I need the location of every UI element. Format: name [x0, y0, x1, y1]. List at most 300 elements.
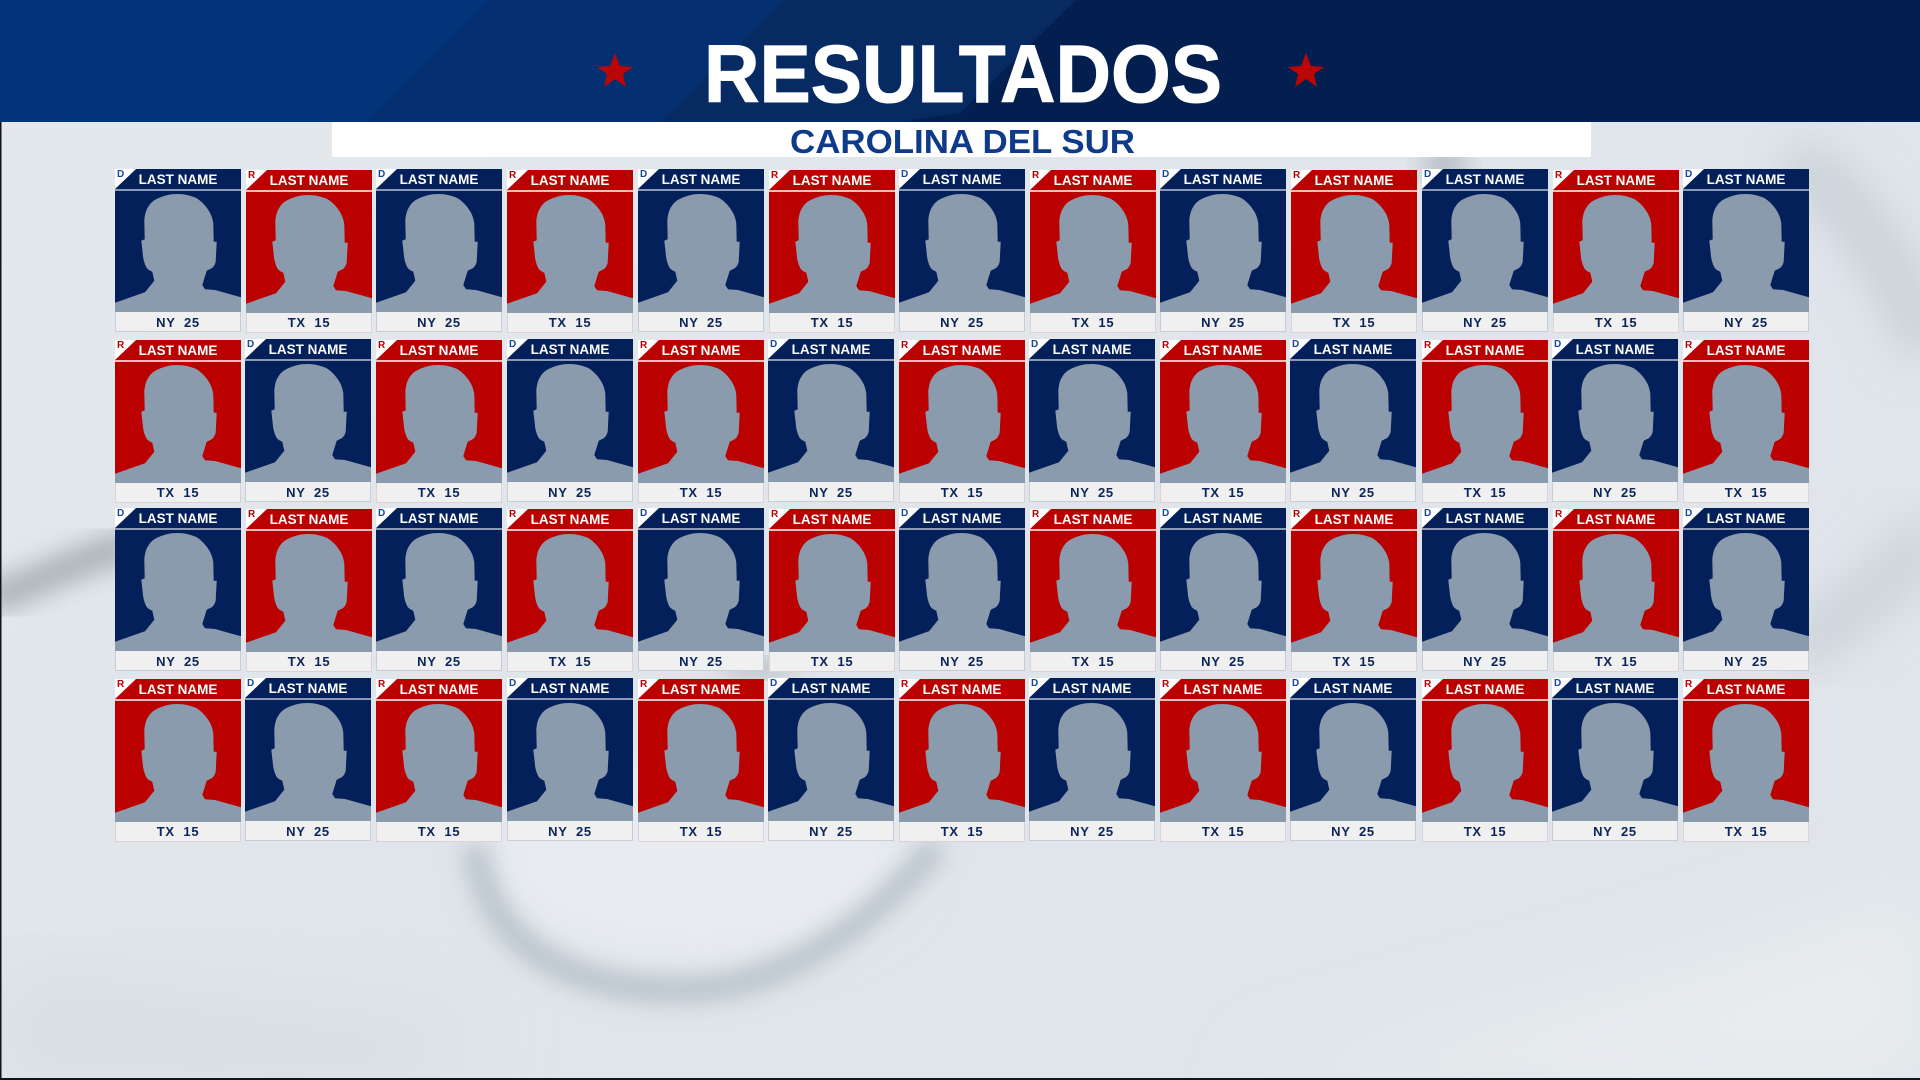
party tag: R: [771, 170, 778, 181]
district: [376, 312, 502, 332]
district: [507, 313, 633, 333]
party tag: [376, 679, 397, 699]
party tag: R: [1293, 170, 1300, 181]
party tag: [1030, 170, 1051, 190]
card: row 3 col 3: [376, 508, 502, 671]
silhouette: [1291, 195, 1417, 313]
district: [246, 652, 372, 672]
district: NY 25: [156, 315, 200, 330]
party tag: [507, 678, 528, 698]
silhouette: [899, 533, 1025, 651]
party tag: [1160, 169, 1181, 189]
silhouette: [376, 533, 502, 651]
party tag: D: [1685, 169, 1692, 180]
name: LAST NAME: [1315, 173, 1393, 188]
district: NY 25: [1463, 654, 1507, 669]
district: TX 15: [941, 485, 983, 500]
district: [1160, 483, 1286, 503]
card: row 4 col 11: [1422, 679, 1548, 842]
district: TX 15: [1333, 654, 1375, 669]
name: LAST NAME: [792, 681, 870, 696]
silhouette: [1422, 194, 1548, 312]
card: row 1 col 4: [507, 170, 633, 333]
district: NY 25: [417, 315, 461, 330]
district: [1422, 312, 1548, 332]
party tag: D: [1554, 339, 1561, 350]
district: [1683, 483, 1809, 503]
district: [1029, 821, 1155, 841]
card: row 4 col 12: [1552, 678, 1678, 841]
silhouette: [1160, 194, 1286, 312]
party tag: [115, 169, 136, 189]
district: [376, 483, 502, 503]
name: LAST NAME: [1053, 681, 1131, 696]
name: LAST NAME: [269, 681, 347, 696]
name: LAST NAME: [139, 682, 217, 697]
district: [768, 482, 894, 502]
name: LAST NAME: [1707, 172, 1785, 187]
card: row 2 col 6: [768, 339, 894, 502]
district: TX 15: [157, 485, 199, 500]
name: LAST NAME: [1446, 343, 1524, 358]
card: row 2 col 2: [245, 339, 371, 502]
district: [899, 312, 1025, 332]
card: row 4 col 9: [1160, 679, 1286, 842]
district: [769, 313, 895, 333]
party tag: [376, 508, 397, 528]
district: NY 25: [286, 485, 330, 500]
district: [1160, 822, 1286, 842]
district: [246, 313, 372, 333]
name: LAST NAME: [1054, 173, 1132, 188]
name: LAST NAME: [400, 511, 478, 526]
district: TX 15: [1202, 485, 1244, 500]
name: LAST NAME: [1314, 342, 1392, 357]
name: LAST NAME: [1054, 512, 1132, 527]
name: LAST NAME: [793, 512, 871, 527]
party tag: R: [117, 340, 124, 351]
silhouette: [507, 364, 633, 482]
silhouette: [1290, 678, 1416, 821]
name: LAST NAME: [923, 172, 1001, 187]
silhouette: [1553, 195, 1679, 313]
name: LAST NAME: [531, 342, 609, 357]
silhouette: [1552, 678, 1678, 821]
party tag: D: [1292, 339, 1299, 350]
silhouette: [1160, 365, 1286, 483]
card: row 4 col 4: [507, 678, 633, 841]
district: TX 15: [418, 824, 460, 839]
district: TX 15: [288, 315, 330, 330]
district: [507, 821, 633, 841]
silhouette: [507, 678, 633, 821]
card: row 1 col 7: [899, 169, 1025, 332]
party tag: D: [378, 508, 385, 519]
district: NY 25: [1070, 485, 1114, 500]
district: [638, 312, 764, 332]
district: NY 25: [1463, 315, 1507, 330]
district: NY 25: [809, 824, 853, 839]
silhouette: [376, 679, 502, 822]
district: TX 15: [549, 315, 591, 330]
party tag: [1290, 678, 1311, 698]
district: [1029, 482, 1155, 502]
party tag: [769, 509, 790, 529]
silhouette: [768, 364, 894, 482]
card: row 3 col 13: [1683, 508, 1809, 671]
silhouette: [246, 534, 372, 652]
party tag: [638, 679, 659, 699]
party tag: D: [1554, 678, 1561, 689]
party tag: [1553, 170, 1574, 190]
party tag: R: [901, 679, 908, 690]
district: NY 25: [286, 824, 330, 839]
party tag: [245, 678, 266, 698]
name: LAST NAME: [1707, 511, 1785, 526]
party tag: R: [1555, 509, 1562, 520]
silhouette: [638, 365, 764, 483]
party tag: R: [640, 340, 647, 351]
silhouette: [376, 194, 502, 312]
name: LAST NAME: [139, 172, 217, 187]
party tag: [1029, 678, 1050, 698]
party tag: [1291, 509, 1312, 529]
district: TX 15: [1464, 824, 1506, 839]
district: [638, 822, 764, 842]
silhouette: [115, 533, 241, 651]
banner background: [0, 0, 1920, 122]
card: row 2 col 8: [1029, 339, 1155, 502]
party tag: D: [1424, 169, 1431, 180]
card: row 4 col 5: [638, 679, 764, 842]
card: row 2 col 4: [507, 339, 633, 502]
district: [638, 483, 764, 503]
silhouette: [507, 534, 633, 652]
party tag: D: [901, 508, 908, 519]
name: LAST NAME: [1184, 172, 1262, 187]
party tag: [899, 169, 920, 189]
district: [1290, 482, 1416, 502]
party tag: D: [247, 678, 254, 689]
party tag: [1422, 679, 1443, 699]
card: row 3 col 4: [507, 509, 633, 672]
name: LAST NAME: [1576, 342, 1654, 357]
district: [1030, 652, 1156, 672]
silhouette: [115, 679, 241, 822]
card: row 1 col 5: [638, 169, 764, 332]
district: [507, 482, 633, 502]
district: [1030, 313, 1156, 333]
district: [376, 651, 502, 671]
party tag: R: [378, 340, 385, 351]
party tag: [1683, 169, 1704, 189]
district: [507, 652, 633, 672]
card: row 2 col 5: [638, 340, 764, 503]
name: LAST NAME: [923, 343, 1001, 358]
party tag: [638, 508, 659, 528]
party tag: [1683, 679, 1704, 699]
silhouette: [899, 679, 1025, 822]
district: NY 25: [1331, 824, 1375, 839]
party tag: [115, 508, 136, 528]
card: row 4 col 3: [376, 679, 502, 842]
card: row 3 col 11: [1422, 508, 1548, 671]
party tag: D: [1162, 508, 1169, 519]
district: NY 25: [940, 315, 984, 330]
candidate grid: [115, 169, 1809, 842]
district: TX 15: [680, 824, 722, 839]
card: row 3 col 2: [246, 509, 372, 672]
district: NY 25: [809, 485, 853, 500]
district: [899, 483, 1025, 503]
party tag: [899, 340, 920, 360]
district: TX 15: [811, 315, 853, 330]
name: LAST NAME: [792, 342, 870, 357]
silhouette: [115, 194, 241, 312]
party tag: R: [1162, 679, 1169, 690]
party tag: D: [117, 169, 124, 180]
party tag: [1422, 169, 1443, 189]
silhouette: [1422, 679, 1548, 822]
district: [1422, 483, 1548, 503]
silhouette: [769, 534, 895, 652]
district: [115, 651, 241, 671]
party tag: D: [1031, 678, 1038, 689]
district: NY 25: [1070, 824, 1114, 839]
silhouette: [638, 533, 764, 651]
name: LAST NAME: [270, 512, 348, 527]
name: LAST NAME: [531, 173, 609, 188]
name: LAST NAME: [269, 342, 347, 357]
district: [115, 312, 241, 332]
district: TX 15: [1595, 315, 1637, 330]
district: [1160, 312, 1286, 332]
name: LAST NAME: [139, 511, 217, 526]
party tag: [1422, 340, 1443, 360]
party tag: D: [117, 508, 124, 519]
party tag: R: [1032, 509, 1039, 520]
silhouette: [1552, 364, 1678, 482]
subtitle bar: [332, 122, 1591, 160]
card: row 3 col 8: [1030, 509, 1156, 672]
party tag: [115, 340, 136, 360]
district: NY 25: [1724, 654, 1768, 669]
district: [1683, 822, 1809, 842]
name: LAST NAME: [1053, 342, 1131, 357]
name: LAST NAME: [662, 682, 740, 697]
card: row 1 col 3: [376, 169, 502, 332]
card: row 3 col 5: [638, 508, 764, 671]
party tag: D: [1292, 678, 1299, 689]
card: row 1 col 8: [1030, 170, 1156, 333]
party tag: [246, 509, 267, 529]
district: [638, 651, 764, 671]
district: NY 25: [548, 824, 592, 839]
party tag: R: [378, 679, 385, 690]
silhouette: [1160, 679, 1286, 822]
name: LAST NAME: [1314, 681, 1392, 696]
silhouette: [1683, 533, 1809, 651]
name: LAST NAME: [531, 681, 609, 696]
silhouette: [1553, 534, 1679, 652]
district: [115, 483, 241, 503]
district: NY 25: [156, 654, 200, 669]
district: [1683, 651, 1809, 671]
party tag: R: [1162, 340, 1169, 351]
district: NY 25: [1593, 485, 1637, 500]
district: NY 25: [417, 654, 461, 669]
silhouette: [115, 365, 241, 483]
district: [899, 651, 1025, 671]
icon: left star: [597, 53, 633, 87]
party tag: [768, 678, 789, 698]
silhouette: [245, 678, 371, 821]
party tag: R: [1424, 679, 1431, 690]
card: row 4 col 8: [1029, 678, 1155, 841]
district: TX 15: [1725, 485, 1767, 500]
card: row 1 col 1: [115, 169, 241, 332]
card: row 4 col 6: [768, 678, 894, 841]
party tag: R: [901, 340, 908, 351]
party tag: [115, 679, 136, 699]
party tag: R: [509, 170, 516, 181]
name: LAST NAME: [270, 173, 348, 188]
district: [1552, 821, 1678, 841]
party tag: R: [1032, 170, 1039, 181]
name: LAST NAME: [1707, 343, 1785, 358]
silhouette: [1291, 534, 1417, 652]
silhouette: [246, 195, 372, 313]
district: [1160, 651, 1286, 671]
district: [245, 821, 371, 841]
district: NY 25: [1593, 824, 1637, 839]
party tag: [507, 509, 528, 529]
party tag: D: [378, 169, 385, 180]
silhouette: [1683, 365, 1809, 483]
card: row 1 col 2: [246, 170, 372, 333]
party tag: D: [640, 508, 647, 519]
district: TX 15: [1202, 824, 1244, 839]
title: RESULTADOS: [704, 29, 1222, 120]
district: TX 15: [811, 654, 853, 669]
district: [1553, 313, 1679, 333]
district: NY 25: [1724, 315, 1768, 330]
name: LAST NAME: [1446, 682, 1524, 697]
party tag: [1160, 340, 1181, 360]
card: row 1 col 6: [769, 170, 895, 333]
card: row 4 col 2: [245, 678, 371, 841]
party tag: [899, 508, 920, 528]
party tag: [769, 170, 790, 190]
card: row 4 col 13: [1683, 679, 1809, 842]
party tag: [1683, 340, 1704, 360]
party tag: [1552, 339, 1573, 359]
district: TX 15: [1072, 315, 1114, 330]
district: NY 25: [1201, 315, 1245, 330]
district: TX 15: [1333, 315, 1375, 330]
party tag: [1160, 679, 1181, 699]
district: [1291, 652, 1417, 672]
silhouette: [768, 678, 894, 821]
district: [769, 652, 895, 672]
silhouette: [1290, 364, 1416, 482]
party tag: [1553, 509, 1574, 529]
party tag: D: [1031, 339, 1038, 350]
district: [899, 822, 1025, 842]
silhouette: [245, 364, 371, 482]
party tag: R: [509, 509, 516, 520]
party tag: R: [248, 509, 255, 520]
name: LAST NAME: [1184, 511, 1262, 526]
party tag: [507, 339, 528, 359]
card: row 2 col 3: [376, 340, 502, 503]
district: [115, 822, 241, 842]
card: row 2 col 12: [1552, 339, 1678, 502]
party tag: R: [771, 509, 778, 520]
name: LAST NAME: [793, 173, 871, 188]
party tag: R: [1555, 170, 1562, 181]
silhouette: [769, 195, 895, 313]
silhouette: [1422, 533, 1548, 651]
district: TX 15: [288, 654, 330, 669]
district: NY 25: [940, 654, 984, 669]
icon: right star: [1288, 53, 1324, 87]
silhouette: [376, 365, 502, 483]
silhouette: [638, 194, 764, 312]
district: NY 25: [1331, 485, 1375, 500]
card: row 3 col 7: [899, 508, 1025, 671]
name: LAST NAME: [139, 343, 217, 358]
party tag: [899, 679, 920, 699]
district: TX 15: [941, 824, 983, 839]
district: [1552, 482, 1678, 502]
silhouette: [1029, 364, 1155, 482]
card: row 3 col 1: [115, 508, 241, 671]
party tag: R: [1424, 340, 1431, 351]
party tag: [507, 170, 528, 190]
silhouette: [899, 365, 1025, 483]
district: [1683, 312, 1809, 332]
card: row 4 col 7: [899, 679, 1025, 842]
silhouette: [1160, 533, 1286, 651]
party tag: [1422, 508, 1443, 528]
name: LAST NAME: [662, 511, 740, 526]
party tag: R: [1685, 340, 1692, 351]
district: TX 15: [1725, 824, 1767, 839]
party tag: D: [509, 678, 516, 689]
silhouette: [1030, 195, 1156, 313]
card: row 2 col 9: [1160, 340, 1286, 503]
name: LAST NAME: [1446, 172, 1524, 187]
card: row 3 col 6: [769, 509, 895, 672]
silhouette: [638, 679, 764, 822]
card: row 1 col 12: [1553, 170, 1679, 333]
party tag: [1683, 508, 1704, 528]
silhouette: [1422, 365, 1548, 483]
district: TX 15: [157, 824, 199, 839]
party tag: D: [247, 339, 254, 350]
party tag: R: [248, 170, 255, 181]
party tag: [638, 340, 659, 360]
card: row 2 col 7: [899, 340, 1025, 503]
party tag: R: [1685, 679, 1692, 690]
name: LAST NAME: [400, 172, 478, 187]
party tag: [1552, 678, 1573, 698]
card: row 4 col 1: [115, 679, 241, 842]
district: [376, 822, 502, 842]
card: row 2 col 11: [1422, 340, 1548, 503]
card: row 3 col 12: [1553, 509, 1679, 672]
